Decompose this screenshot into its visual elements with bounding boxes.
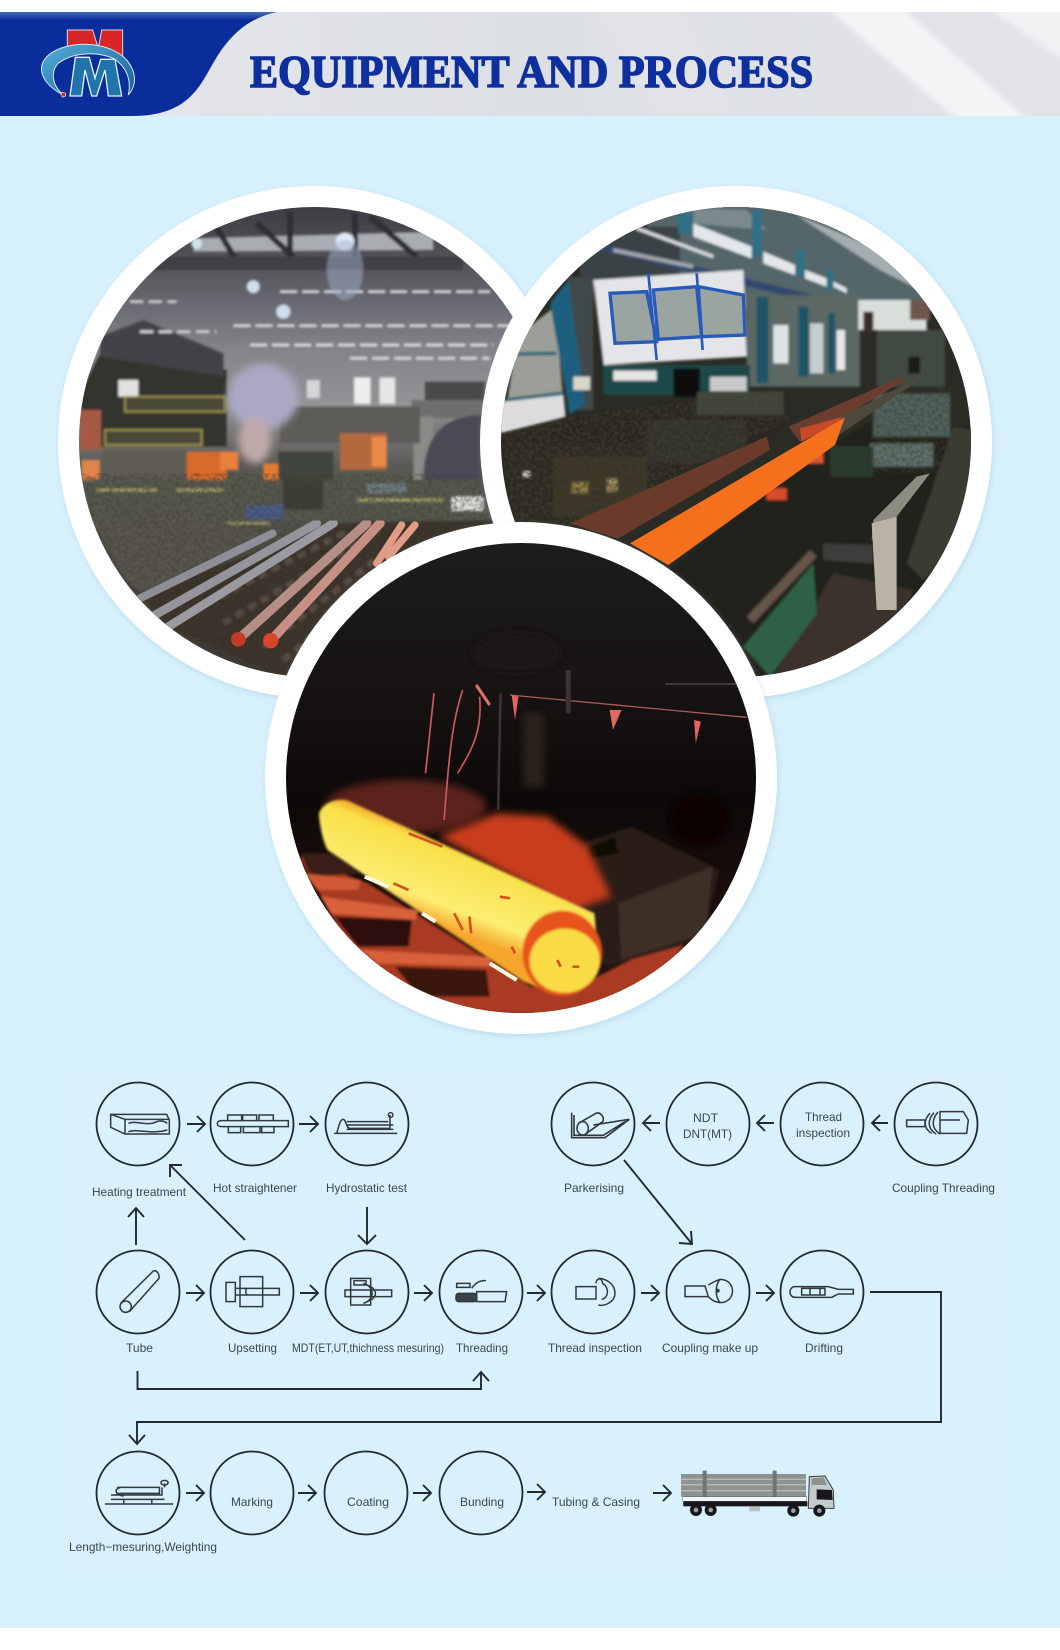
label: Coupling make up: Coupling make up — [662, 1341, 758, 1355]
icon: tube — [121, 1271, 159, 1312]
label: Hydrostatic test: Hydrostatic test — [326, 1181, 408, 1195]
photo: glowing orange tube on roller line — [497, 203, 977, 683]
label: Marking: Marking — [231, 1495, 273, 1509]
label: Thread inspection: Thread inspection — [548, 1341, 642, 1355]
label: Bunding: Bunding — [460, 1495, 504, 1509]
label: Hot straightener: Hot straightener — [213, 1181, 297, 1195]
icon: delivery truck — [681, 1471, 834, 1517]
label: DNT(MT): DNT(MT) — [683, 1127, 732, 1141]
photo frame: rolling mill hall — [58, 186, 570, 698]
icon: upsetting — [226, 1277, 279, 1307]
icon: MDT — [345, 1278, 392, 1305]
icon: threading — [457, 1281, 507, 1302]
label: Upsetting: Upsetting — [228, 1341, 277, 1355]
flow arrows — [128, 1115, 941, 1501]
label: Heating treatment: Heating treatment — [92, 1185, 187, 1199]
header banner — [0, 12, 1060, 116]
label: Length-mesuring,Weighting: Length−mesuring,Weighting — [69, 1540, 217, 1554]
label: Parkerising: Parkerising — [564, 1181, 624, 1195]
process icons left group — [111, 1113, 507, 1312]
photo frame: hot tube line — [480, 186, 992, 698]
label: Coating: Coating — [347, 1495, 389, 1509]
icon: hot straightener — [217, 1115, 288, 1133]
label: Threading: Threading — [456, 1341, 508, 1355]
label: NDT: NDT — [693, 1111, 719, 1125]
label: inspection: inspection — [796, 1126, 850, 1140]
label: MDT: MDT(ET,UT,thichness mesuring) — [292, 1341, 444, 1355]
photo: steel mill interior with tubes — [70, 203, 537, 683]
icon: length measuring machine — [105, 1480, 173, 1504]
icon: coupling threading — [907, 1112, 968, 1134]
icon: hydrostatic test — [334, 1115, 397, 1133]
process icons right group — [572, 1112, 968, 1305]
label: Coupling Threading: Coupling Threading — [892, 1181, 995, 1195]
title: EQUIPMENT AND PROCESS — [250, 46, 813, 97]
icon: drifting — [790, 1287, 853, 1297]
icon: parkerising — [572, 1113, 629, 1138]
icon: thread inspection — [576, 1278, 615, 1305]
label: Tubing & Casing: Tubing & Casing — [552, 1495, 640, 1509]
step circles — [96, 1082, 978, 1534]
label: Tube: Tube — [126, 1341, 153, 1355]
icon: heating furnace — [111, 1114, 169, 1134]
header blue shape — [0, 12, 277, 116]
icon: company logo — [41, 30, 134, 97]
icon: coupling make up — [685, 1279, 732, 1303]
label: Thread: Thread — [805, 1110, 842, 1124]
panel: process flow diagram — [69, 1075, 1000, 1575]
photo: glowing steel billet — [280, 540, 760, 1017]
photo frame: billet — [265, 522, 777, 1034]
label: Drifting: Drifting — [805, 1341, 843, 1355]
